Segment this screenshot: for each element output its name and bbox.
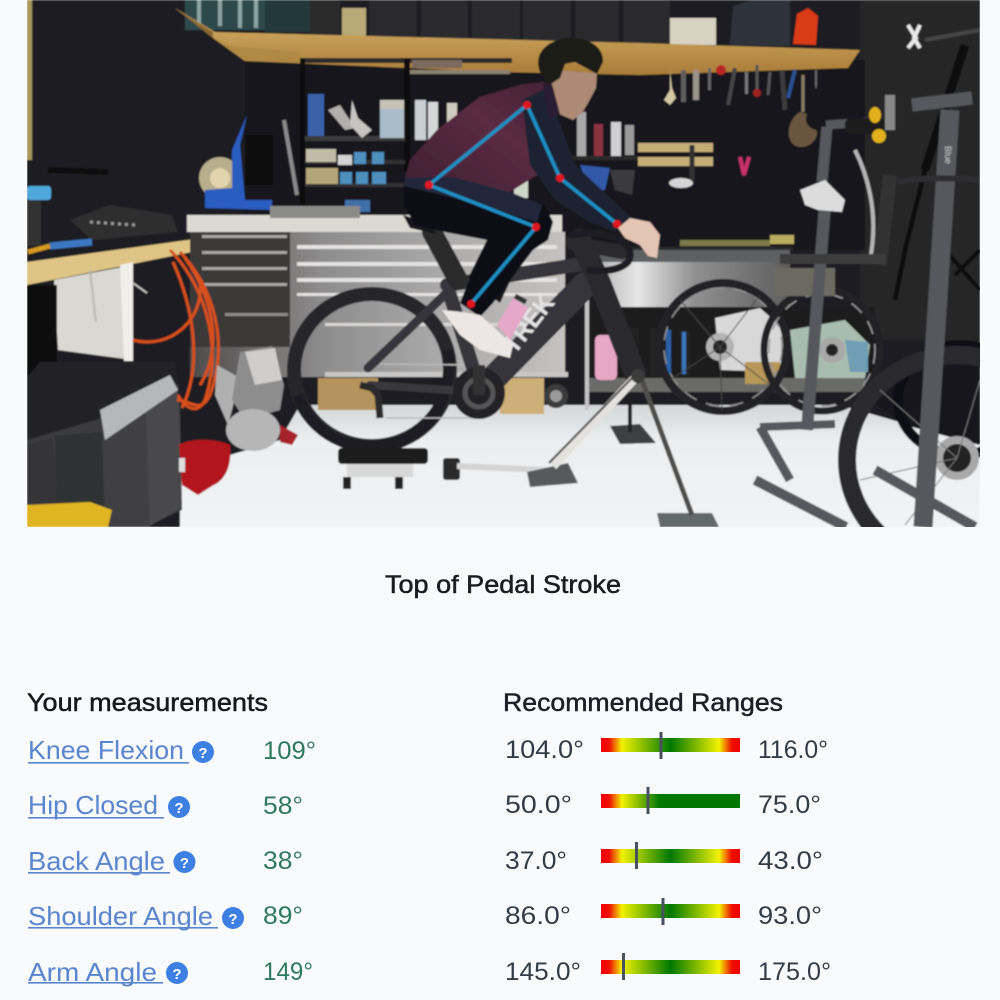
- range: arm angle: 175.0°: [758, 958, 831, 986]
- trainer: front fork mount: [457, 369, 719, 527]
- row: hip closed: [28, 790, 303, 820]
- range: hip closed: 50.0°: [505, 791, 572, 819]
- sink and lower rack: [585, 235, 875, 410]
- workshop wall: [27, 0, 980, 527]
- bike: chainring and crank: [360, 365, 505, 419]
- white wall hook: [908, 25, 920, 48]
- bike: saddle: [403, 215, 436, 234]
- row: back angle: 38°: [263, 847, 303, 875]
- row: shoulder angle: [28, 901, 303, 931]
- row: arm angle: Arm Angle: [28, 957, 157, 987]
- trainer: rear unit: [338, 448, 460, 489]
- range: back angle: 43.0°: [758, 847, 823, 875]
- row: knee flexion: 109°: [263, 737, 316, 765]
- rider: white shoe: [442, 310, 513, 358]
- blue truing stand: [199, 115, 297, 210]
- range: arm angle: [505, 953, 831, 986]
- bike: rear wheel: [294, 294, 480, 446]
- range: knee flexion: [505, 732, 828, 764]
- repair stand, rear: [875, 98, 980, 527]
- range: arm angle: 145.0°: [505, 958, 581, 986]
- row: arm angle: 149°: [263, 958, 313, 986]
- row: arm angle: [28, 957, 313, 987]
- row: hip closed: Hip Closed: [28, 790, 158, 820]
- left workbench: [27, 238, 202, 361]
- rider: hand: [618, 218, 660, 258]
- rider: head and hair: [538, 38, 603, 120]
- row: shoulder angle: Shoulder Angle: [28, 901, 213, 931]
- black shelving unit with bottles: [300, 58, 512, 212]
- tools on the bench: [27, 170, 180, 252]
- heading: recommended ranges: Recommended Ranges: [503, 689, 783, 717]
- stainless tool cabinet: [187, 206, 568, 414]
- range: hip closed: 75.0°: [758, 791, 821, 819]
- wall rack and bottles: [495, 112, 749, 198]
- left black storage cabinets: [27, 285, 182, 527]
- panel: your measurements: [27, 689, 316, 987]
- panel: recommended ranges: [503, 689, 831, 986]
- row: arm angle: ?: [172, 966, 182, 983]
- rider: legs: [404, 172, 553, 317]
- row: hip closed: ?: [174, 800, 184, 817]
- upper shelf with storage boxes: [175, 0, 860, 75]
- row: shoulder angle: ?: [228, 911, 238, 928]
- range: back angle: 37.0°: [505, 847, 567, 875]
- wheels leaning on rack: [659, 268, 880, 411]
- repair stand, front: [755, 122, 890, 527]
- range: back angle: [505, 842, 823, 875]
- row: back angle: [28, 846, 303, 876]
- clamp, cloth and yellow knobs: [780, 95, 895, 264]
- row: back angle: Back Angle: [28, 846, 165, 876]
- range: shoulder angle: [505, 898, 822, 930]
- row: back angle: ?: [180, 855, 189, 872]
- photo: rider on bike trainer in a workshop: [27, 0, 1000, 565]
- rider: burgundy jersey: [405, 82, 552, 192]
- hanging tools under shelf: [664, 65, 817, 147]
- range: knee flexion: 104.0°: [505, 736, 584, 764]
- row: knee flexion: Knee Flexion: [28, 735, 184, 765]
- heading: Top of Pedal Stroke: Top of Pedal Stroke: [385, 571, 621, 599]
- floor: [180, 405, 980, 527]
- row: knee flexion: ?: [198, 745, 208, 762]
- range: shoulder angle: 86.0°: [505, 902, 571, 930]
- bike: water bottle: [497, 296, 528, 340]
- background black bike frame: [895, 30, 980, 300]
- air compressor and red tank: [179, 346, 298, 495]
- row: knee flexion: [28, 735, 316, 765]
- row: shoulder angle: 89°: [263, 902, 303, 930]
- range: shoulder angle: 93.0°: [758, 902, 822, 930]
- rider: navy arm: [522, 88, 632, 232]
- row: hip closed: 58°: [263, 792, 303, 820]
- foreground large wheel: [837, 340, 980, 527]
- heading: your measurements: Your measurements: [27, 689, 268, 717]
- red air hose: [133, 250, 218, 409]
- repair stand, rear: Blue: [943, 146, 953, 164]
- pose tracking skeleton: [425, 101, 621, 308]
- bike: frame: [368, 232, 635, 392]
- range: hip closed: [505, 787, 821, 819]
- range: knee flexion: 116.0°: [758, 736, 828, 764]
- bike: TREK down tube lettering: TREK: [496, 288, 560, 359]
